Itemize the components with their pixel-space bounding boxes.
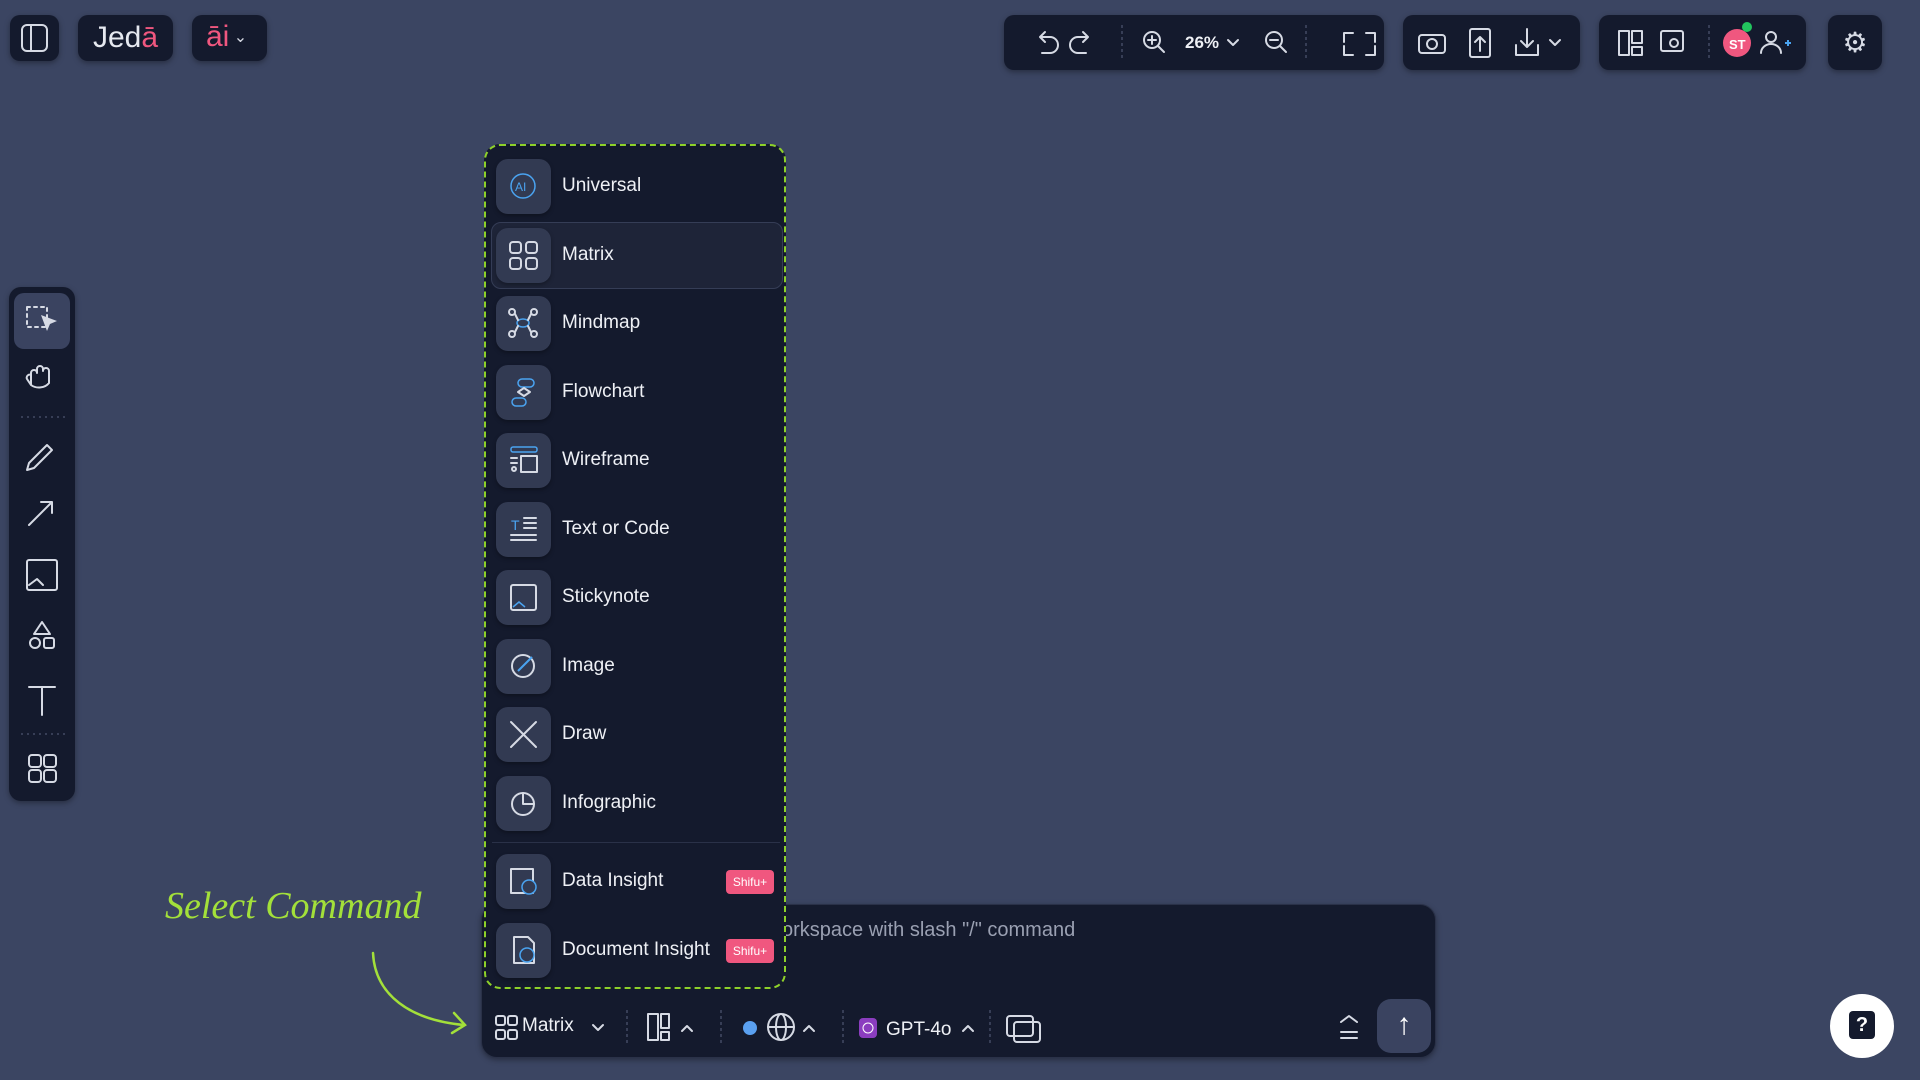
- item: Mindmap: Mindmap: [562, 312, 640, 333]
- toolbar: zoom/history: 26%: [1185, 33, 1219, 52]
- item: Data Insight: Shifu+: [733, 875, 767, 889]
- icon: arrow: [29, 502, 52, 525]
- icon: text: [29, 687, 55, 715]
- item: Universal: Universal: [562, 175, 641, 196]
- button: help: [1830, 994, 1894, 1058]
- item: Flowchart: Flowchart: [562, 381, 644, 402]
- item: Text or Code: T: [511, 517, 520, 533]
- item: Data Insight: Data Insight: [562, 870, 663, 891]
- prompt input box: [481, 904, 1436, 1058]
- item: Wireframe: Wireframe: [562, 449, 650, 470]
- toolbar: zoom/history: [1004, 15, 1384, 70]
- logo: Jeda: Jedā: [93, 21, 158, 54]
- bottom controls: GPT-4o: [886, 1019, 951, 1040]
- item: Image: Image: [562, 655, 615, 676]
- item: Universal: [496, 159, 641, 216]
- item: Flowchart: [496, 365, 644, 422]
- bottom controls: [495, 999, 1431, 1053]
- item: Universal: AI: [515, 180, 526, 194]
- item: Stickynote: [496, 570, 650, 626]
- command menu: [484, 144, 786, 989]
- button: send: ↑: [1396, 1008, 1412, 1041]
- toolbar: capture/export: [1403, 15, 1580, 70]
- placeholder text: orkspace with slash "/" command: [782, 919, 1075, 941]
- item: Text or Code: Text or Code: [562, 518, 670, 539]
- callout: Select Command: Select Command: [165, 885, 421, 927]
- icon: select: [27, 307, 57, 331]
- item: Draw: [496, 707, 606, 764]
- icon: grid: [29, 755, 56, 782]
- item: Matrix: Matrix: [562, 244, 614, 265]
- button: help: ?: [1856, 1014, 1868, 1036]
- item: Draw: Draw: [562, 723, 606, 744]
- item: Infographic: Infographic: [562, 792, 656, 813]
- toolbar: layout/users: ST: [1729, 37, 1746, 52]
- icon: pencil: [27, 445, 52, 470]
- item: Matrix: [496, 228, 614, 285]
- bottom controls: Matrix: [522, 1015, 574, 1036]
- item: Wireframe: [496, 433, 650, 490]
- item: Document Insight: Document Insight: [562, 939, 710, 960]
- item: Text or Code: [496, 502, 670, 558]
- button: send: [1377, 999, 1431, 1053]
- icon: shapes: [30, 622, 54, 648]
- item: Stickynote: Stickynote: [562, 586, 650, 607]
- arrow: to Matrix selector: [372, 952, 467, 1034]
- button: settings: ⚙: [1842, 27, 1868, 58]
- item: Infographic: [496, 776, 656, 832]
- toolbar: layout/users: [1599, 15, 1806, 70]
- button: ai menu: āi ⌄: [206, 20, 247, 53]
- button: sidebar toggle: [10, 15, 59, 61]
- icon: image: [27, 560, 57, 590]
- button: settings: [1828, 15, 1882, 70]
- item: Image: [496, 639, 615, 696]
- button: ai menu: [192, 15, 267, 61]
- logo: Jeda: [78, 15, 173, 61]
- item: Mindmap: [496, 296, 640, 352]
- item: Data Insight: [496, 854, 774, 910]
- left toolbar: [9, 287, 75, 801]
- item: Document Insight: Shifu+: [733, 944, 767, 958]
- item: Document Insight: [496, 923, 774, 980]
- selected row highlight: [491, 222, 783, 289]
- icon: hand: [27, 366, 49, 388]
